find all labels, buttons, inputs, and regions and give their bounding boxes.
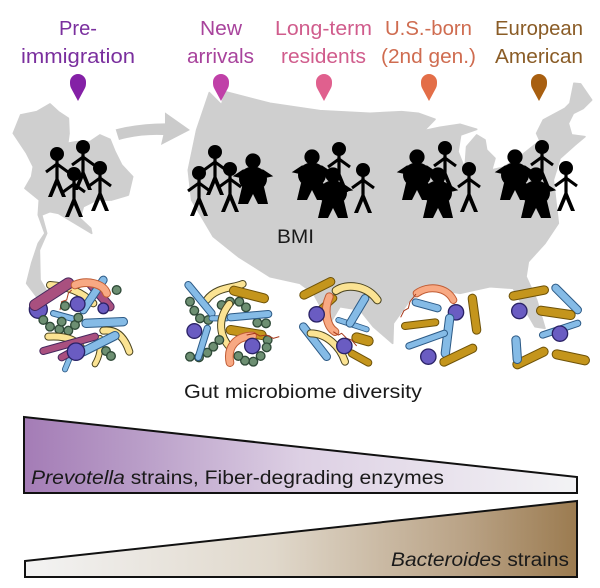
label: Long-term residents: Long-term (275, 17, 372, 40)
microbiome: Long-term residents (303, 282, 377, 363)
label: European American (495, 17, 583, 68)
label: Pre-immigration: Pre- (59, 17, 97, 40)
label: New arrivals: New (200, 17, 242, 40)
map: United States (188, 83, 592, 343)
pin: Long-term residents (316, 74, 332, 101)
wedge: Prevotella decreasing (24, 417, 577, 493)
people: New arrivals group (188, 145, 272, 216)
label: Pre-immigration: immigration (21, 45, 135, 68)
people: Long-term residents group (293, 142, 374, 218)
microbiome: U.S.-born (401, 288, 477, 364)
people: Pre-immigration group (46, 140, 111, 217)
text: BMI: BMI (277, 227, 314, 248)
label: U.S.-born 2nd generation: U.S.-born (385, 17, 472, 40)
microbiome: Pre-immigration (29, 280, 129, 369)
label: Long-term residents: residents (281, 45, 366, 68)
people: U.S.-born group (398, 141, 480, 218)
label: U.S.-born 2nd generation (381, 17, 476, 68)
wedge: Bacteroides increasing (25, 501, 577, 577)
label: European American: European (495, 17, 583, 40)
label: Pre-immigration (21, 17, 135, 68)
arrow: migration (116, 112, 190, 145)
pin: New arrivals (213, 74, 229, 101)
text: Prevotella strains: Prevotella strains, Fiber-degrading enzymes (31, 468, 444, 489)
pin: Pre-immigration (70, 74, 86, 101)
map: Thailand (13, 104, 133, 303)
text: Gut microbiome diversity: Gut microbiome diversity (184, 382, 423, 403)
microbiome: European American (512, 288, 585, 364)
text: Bacteroides strains: Bacteroides strains (391, 550, 569, 571)
label: U.S.-born 2nd generation: (2nd gen.) (381, 45, 476, 68)
pin: U.S.-born (421, 74, 437, 101)
microbiome: New arrivals (186, 284, 279, 366)
people: European American group (496, 140, 577, 218)
label: New arrivals (187, 17, 254, 68)
pin: European American (531, 74, 547, 101)
label: European American: American (495, 45, 583, 68)
label: Long-term residents (275, 17, 372, 68)
label: New arrivals: arrivals (187, 45, 254, 68)
